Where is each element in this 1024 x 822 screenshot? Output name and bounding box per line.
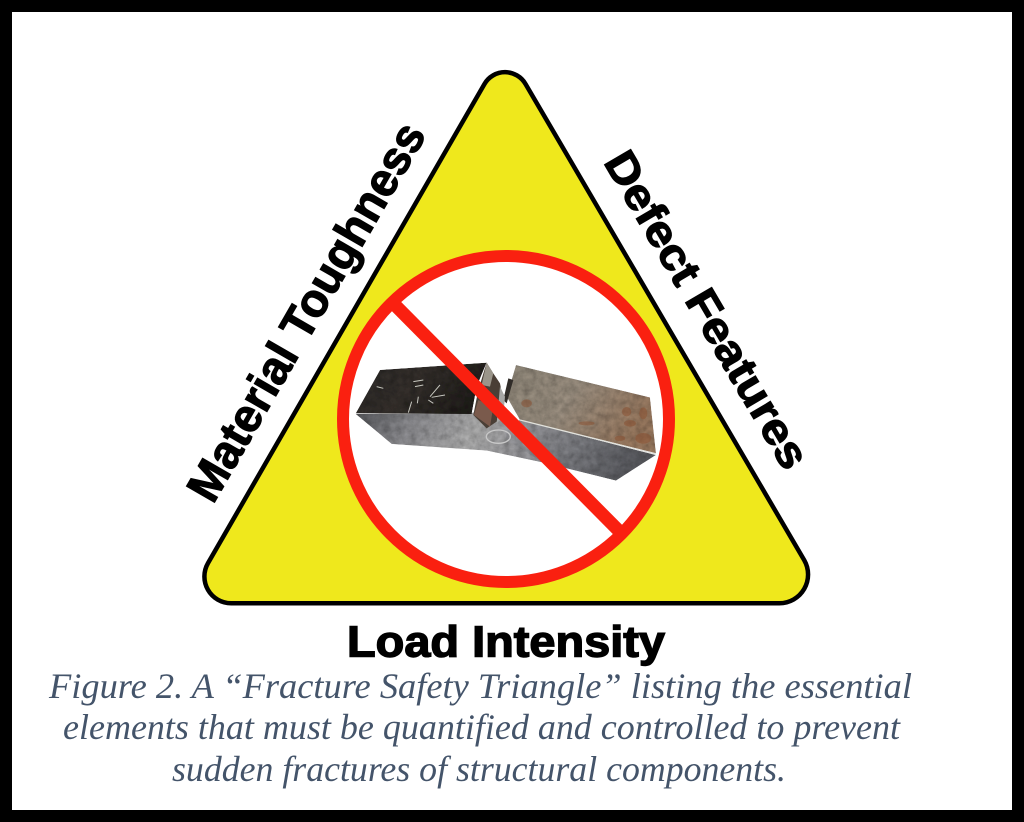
label: load intensity: Load Intensity	[347, 618, 666, 666]
fracture faces	[473, 363, 513, 428]
fractured metal bar photo	[356, 363, 656, 481]
no-entry circle background	[343, 256, 669, 582]
label: material toughness: Material Toughness	[176, 113, 436, 510]
prohibition circle and slash	[343, 256, 669, 582]
label: defect features: Defect Features	[594, 142, 819, 478]
figure caption: Figure 2. A “Fracture Safety Triangle” listing the essential	[48, 666, 912, 706]
figure caption: sudden fractures of structural components.	[172, 749, 786, 789]
triangle	[204, 72, 808, 603]
figure caption: elements that must be quantified and controlled to prevent	[63, 707, 901, 747]
figure caption	[48, 666, 912, 789]
